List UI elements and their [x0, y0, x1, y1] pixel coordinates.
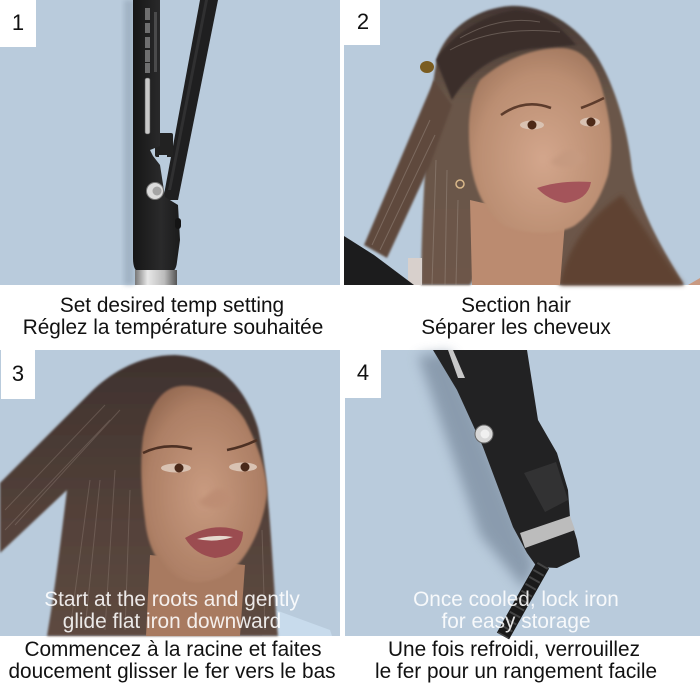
- step number 4: 4: [357, 360, 369, 385]
- step number 2: 2: [357, 9, 369, 34]
- flat iron: open with controls: [133, 0, 218, 285]
- flat iron: locked with cord: [433, 350, 580, 636]
- brows: [501, 104, 551, 115]
- earring: [456, 180, 464, 188]
- caption 4: le fer pour un rangement facile: [375, 660, 657, 683]
- caption 3: doucement glisser le fer vers le bas: [8, 660, 336, 683]
- hair highlights: [372, 20, 560, 285]
- white shirt: [408, 258, 422, 285]
- caption 4: [375, 638, 657, 683]
- lips: [537, 182, 591, 203]
- brows: [143, 446, 192, 453]
- eyes: [161, 464, 191, 472]
- caption 2: [421, 294, 611, 339]
- black clothing: [344, 236, 414, 285]
- caption 3: [8, 638, 336, 683]
- shirt: [262, 608, 332, 636]
- overlay caption 3: glide flat iron downward: [63, 610, 281, 633]
- caption 2: Séparer les cheveux: [421, 316, 611, 339]
- eyes: [520, 120, 544, 130]
- nose: [198, 489, 234, 509]
- overlay caption 4: Once cooled, lock iron: [413, 588, 619, 611]
- caption 4: Une fois refroidi, verrouillez: [388, 638, 640, 661]
- lips: [185, 527, 243, 558]
- step number 3: 3: [12, 361, 24, 386]
- iron shadow: [418, 352, 535, 590]
- woman with hair sectioned: [344, 6, 700, 285]
- overlay caption 3: Start at the roots and gently: [44, 588, 300, 611]
- hair clip: [420, 61, 434, 73]
- panel 1: set temperature: [0, 0, 340, 285]
- caption 3: Commencez à la racine et faites: [24, 638, 322, 661]
- step number 3: [1, 350, 35, 399]
- woman with straight hair: [0, 355, 332, 636]
- caption 1: Réglez la température souhaitée: [23, 316, 323, 339]
- hair highlights: [5, 405, 265, 630]
- step number 1: [0, 0, 36, 47]
- panel 4: lock and store: [345, 350, 700, 636]
- iron shadow: [124, 0, 134, 285]
- caption 1: Set desired temp setting: [60, 294, 284, 317]
- nose: [550, 150, 584, 168]
- step number 4: [345, 350, 381, 398]
- caption 2: Section hair: [461, 294, 571, 317]
- panel 3: glide flat iron: [0, 350, 340, 636]
- step number 1: 1: [12, 10, 24, 35]
- overlay caption 4: for easy storage: [441, 610, 591, 633]
- overlay caption 3: [44, 588, 300, 633]
- caption 1: [23, 294, 323, 339]
- step number 2: [344, 0, 380, 45]
- overlay caption 4: [413, 588, 619, 633]
- panel 2: section hair: [344, 0, 700, 285]
